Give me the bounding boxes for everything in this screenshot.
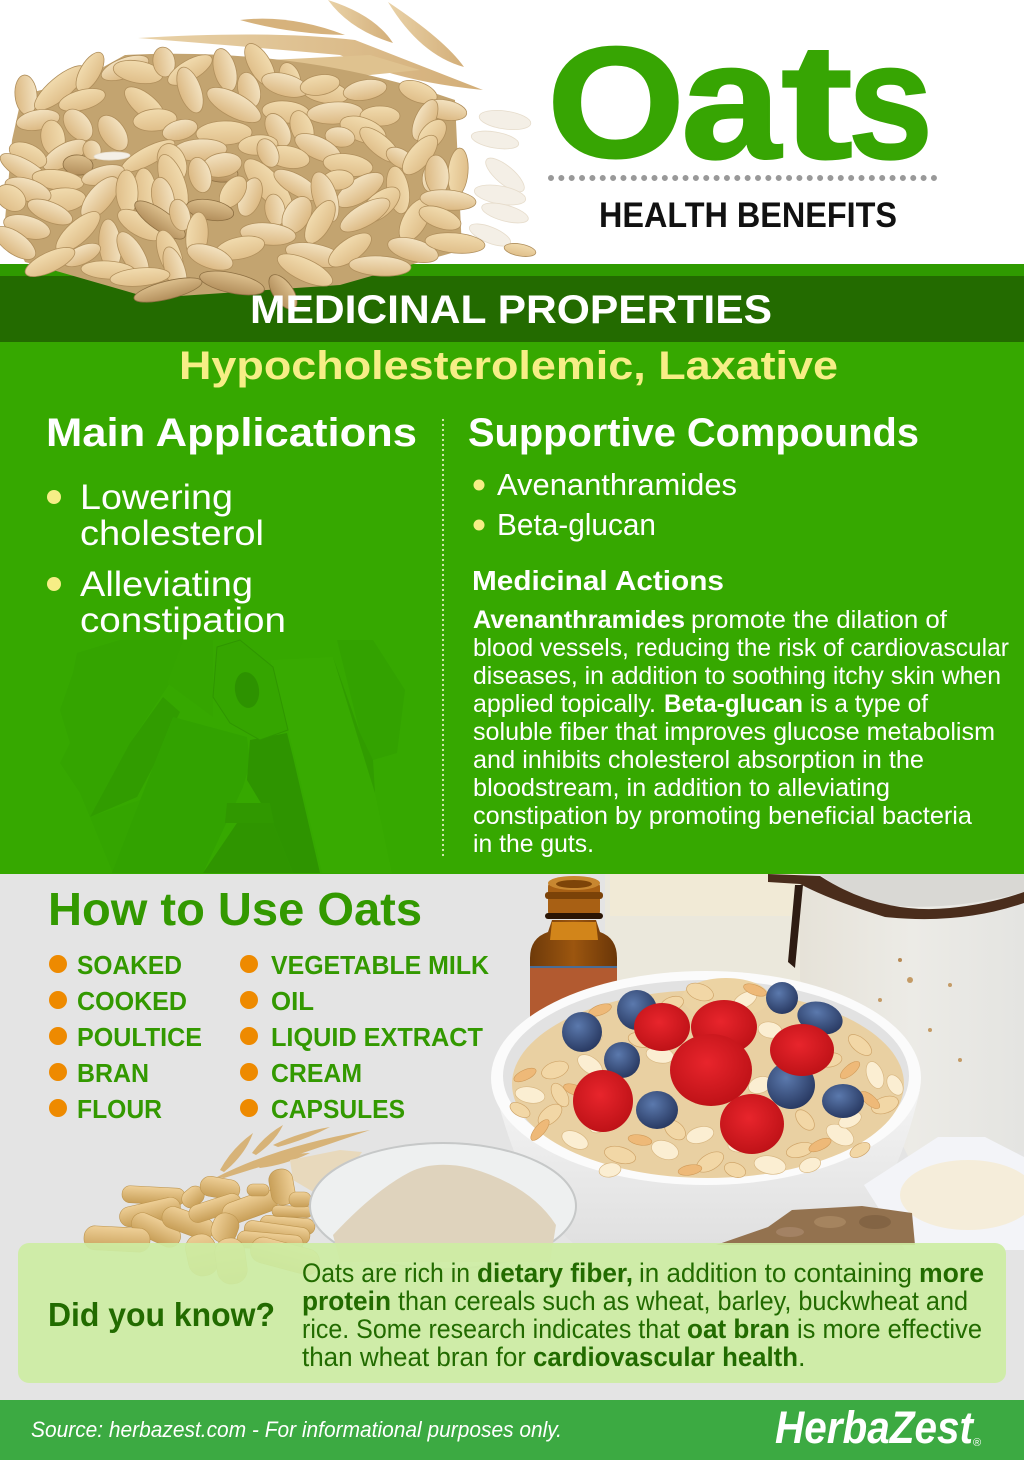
panel: did you know — [18, 1243, 1006, 1383]
title: a — [681, 9, 783, 194]
text block: oat facts — [302, 1258, 984, 1372]
panel: main applications — [46, 411, 417, 640]
text block: medicinal actions: Avenanthramides — [473, 606, 685, 634]
heading: supportive compounds: Supportive Compounds — [468, 411, 919, 455]
subtitle: HEALTH BENEFITS — [599, 196, 897, 235]
panel: how to use — [48, 883, 489, 1124]
illustration: oat ears — [217, 1125, 370, 1193]
logo: HerbaZest: ® — [973, 1437, 981, 1449]
list: preparations left column: SOAKED — [77, 950, 182, 980]
text: properties list: Hypocholesterolemic, Laxative — [179, 344, 838, 388]
list: preparations right column: LIQUID EXTRACT — [271, 1022, 483, 1052]
blueberries — [562, 982, 864, 1129]
text block: medicinal actions: blood vessels, reducing the risk of cardiovascular — [473, 634, 1009, 662]
illustration: oat capsules — [83, 1167, 322, 1286]
title: O — [547, 15, 685, 191]
illustration: amber oil bottle — [530, 876, 617, 1020]
text block: medicinal actions — [473, 606, 1009, 858]
text block: medicinal actions: promote the dilation of — [691, 606, 947, 634]
list: preparations left column: POULTICE — [77, 1022, 202, 1052]
text block: oat facts: rice. Some research indicates that — [302, 1314, 680, 1344]
title: s — [848, 9, 933, 194]
list: preparations right column: OIL — [271, 986, 314, 1016]
list: preparations left column: COOKED — [77, 986, 187, 1016]
text block: medicinal actions: soluble fiber that improves glucose metabolism — [473, 718, 995, 746]
bullet item: lowering cholesterol: cholesterol — [80, 514, 264, 553]
text block: oat facts: Oats are rich in — [302, 1258, 470, 1288]
list: preparations left column — [49, 950, 202, 1124]
text block: medicinal actions: diseases, in addition to soothing itchy skin when — [473, 662, 1001, 690]
illustration: jar of overnight oats — [768, 874, 1024, 1190]
illustration: glass of milk — [605, 874, 805, 1004]
bullet item: alleviating constipation: constipation — [80, 601, 286, 640]
text block: medicinal actions: Beta-glucan — [664, 690, 803, 718]
text block: medicinal actions: applied topically. — [473, 690, 656, 718]
text block: oat facts: . — [798, 1342, 806, 1372]
dotted divider — [551, 175, 937, 181]
list: preparations right column: VEGETABLE MILK — [271, 950, 489, 980]
heading: how to use oats: How to Use Oats — [48, 883, 422, 935]
illustration: bowl of oat flour — [310, 1143, 576, 1269]
footer — [0, 1400, 1024, 1460]
panel: medicinal properties background — [0, 264, 1024, 874]
illustration: pile of oat grains — [0, 0, 537, 314]
logo: HerbaZest: HerbaZest — [775, 1402, 975, 1453]
oat flakes — [507, 980, 907, 1180]
title: t — [781, 10, 853, 193]
text block: oat facts: dietary fiber, — [477, 1258, 633, 1288]
text block: oat facts: than cereals such as wheat, barley, buckwheat and — [398, 1286, 968, 1316]
bullet item: lowering cholesterol — [47, 478, 264, 553]
text block: oat facts: is more effective — [797, 1314, 982, 1344]
illustration: bowl of oatmeal with berries — [491, 971, 921, 1260]
bullet item: alleviating constipation: Alleviating — [80, 565, 253, 604]
illustration: bran flakes — [716, 1206, 915, 1245]
list: preparations right column: CAPSULES — [271, 1094, 405, 1124]
source line: Source: herbazest.com - For informational purposes only. — [31, 1417, 562, 1442]
text block: oat facts: in addition to containing — [639, 1258, 912, 1288]
illustration: yogurt cup — [864, 1137, 1024, 1250]
text block: oat facts: oat bran — [687, 1314, 790, 1344]
heading: did you know: Did you know? — [48, 1296, 275, 1333]
text block: medicinal actions: and inhibits cholesterol absorption in the — [473, 746, 924, 774]
text block: medicinal actions: constipation by promoting beneficial bacteria — [473, 802, 972, 830]
text block: oat facts: than wheat bran for — [302, 1342, 526, 1372]
text block: oat facts: cardiovascular health — [533, 1342, 798, 1372]
bullet item: avenanthramides: Avenanthramides — [497, 467, 737, 502]
heading: main applications: Main Applications — [46, 411, 417, 455]
title — [547, 9, 933, 194]
text block: medicinal actions: in the guts. — [473, 830, 594, 858]
bullet item: lowering cholesterol: Lowering — [80, 478, 233, 517]
text block: medicinal actions: is a type of — [810, 690, 928, 718]
list: preparations left column: FLOUR — [77, 1094, 162, 1124]
strawberries — [573, 1000, 834, 1154]
heading: medicinal properties: MEDICINAL PROPERTIES — [250, 288, 772, 332]
list: preparations left column: BRAN — [77, 1058, 149, 1088]
text block: oat facts: protein — [302, 1286, 391, 1316]
panel: supportive compounds — [468, 411, 1009, 858]
panel: how to use background — [0, 874, 1024, 1400]
dotted column divider — [442, 420, 444, 856]
bullet item: beta-glucan: Beta-glucan — [497, 507, 656, 542]
text block: medicinal actions: bloodstream, in addition to alleviating — [473, 774, 890, 802]
watermark: figure holding toilet roll — [60, 640, 405, 873]
subheading: medicinal actions: Medicinal Actions — [472, 565, 724, 596]
bullet item: alleviating constipation — [47, 565, 286, 640]
text block: oat facts: more — [919, 1258, 984, 1288]
list: preparations right column — [240, 950, 489, 1124]
list: preparations right column: CREAM — [271, 1058, 362, 1088]
